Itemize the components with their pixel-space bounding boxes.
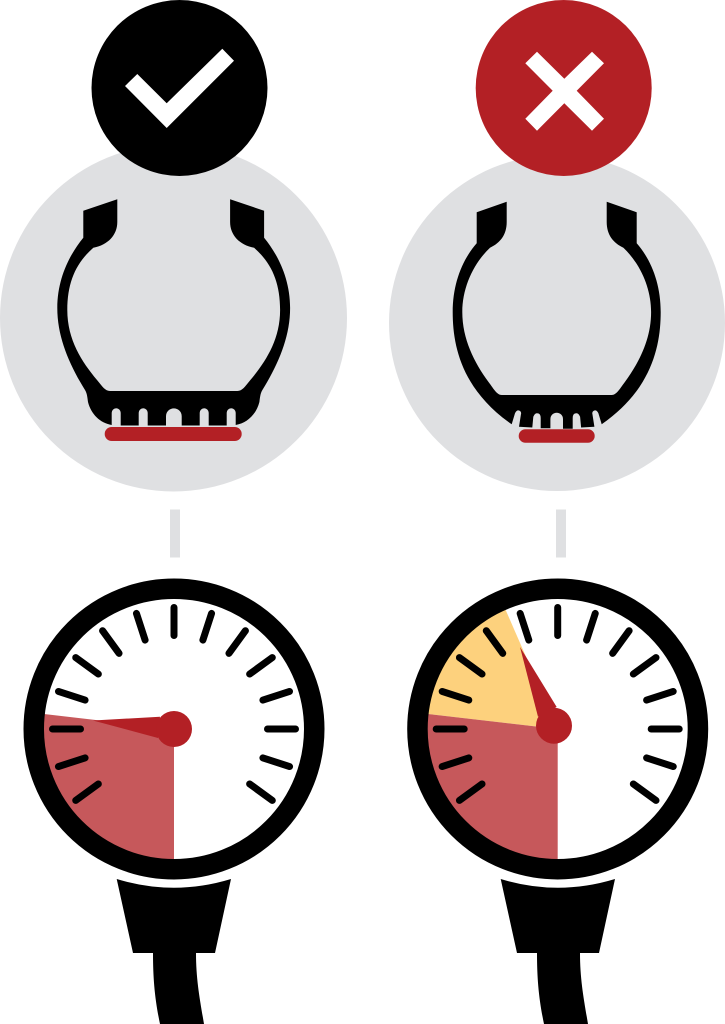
gauge needle xyxy=(93,711,192,747)
road contact patch: narrow xyxy=(519,429,595,443)
connector: right tire to gauge xyxy=(556,510,566,558)
road contact patch: wide xyxy=(105,427,242,441)
background circle: correct tire xyxy=(0,144,347,492)
gauge ring xyxy=(417,589,698,869)
panel: incorrect pressure tire xyxy=(389,155,725,491)
red sector: low pressure zone xyxy=(427,714,558,860)
gauge tick marks xyxy=(436,608,679,800)
background circle: incorrect tire xyxy=(389,155,725,491)
gauge needle xyxy=(520,647,572,744)
icon: black circle with check mark xyxy=(92,0,268,176)
red sector: low pressure zone xyxy=(43,714,174,860)
gauge tick marks xyxy=(52,608,296,800)
gauge handle and hose xyxy=(117,879,231,1024)
icon: tire cross-section with reduced contact xyxy=(453,202,661,429)
icon: red circle with cross mark xyxy=(476,0,652,176)
gauge handle and hose xyxy=(501,879,615,1024)
gauge face xyxy=(43,598,305,860)
yellow sector: caution zone xyxy=(428,609,558,729)
icon: tire cross-section with full contact xyxy=(57,199,290,426)
connector: left tire to gauge xyxy=(170,510,180,558)
panel: correct pressure tire xyxy=(0,144,347,492)
gauge: correct pressure xyxy=(34,589,314,1024)
gauge: incorrect pressure xyxy=(417,589,698,1024)
gauge face xyxy=(427,598,689,860)
gauge ring xyxy=(34,589,314,869)
